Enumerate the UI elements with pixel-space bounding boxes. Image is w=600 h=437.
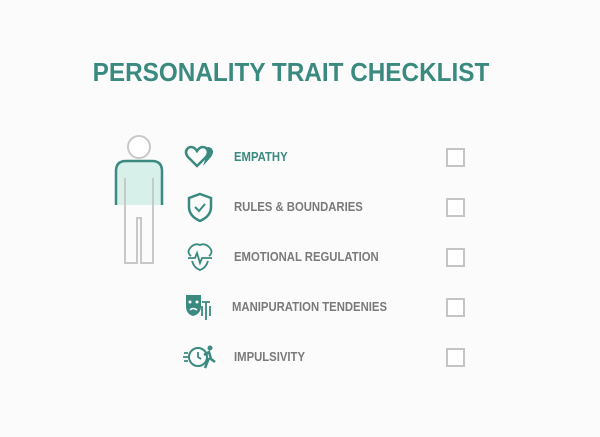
row: impulsivity: IMPULSIVITY	[234, 349, 305, 364]
row: empathy	[184, 146, 465, 168]
icon: runner clock	[183, 346, 216, 368]
row: rules	[188, 192, 465, 222]
icon: mask	[186, 295, 211, 320]
icon: brain	[188, 243, 212, 271]
row: empathy: EMPATHY	[234, 149, 288, 164]
icon: hearts	[184, 146, 213, 168]
row: impulsivity	[183, 346, 465, 368]
row: emotional regulation	[188, 243, 465, 271]
row: rules: RULES & BOUNDARIES	[234, 199, 363, 214]
row: manipulation	[186, 295, 465, 320]
row: emotional regulation: EMOTIONAL REGULATION	[234, 249, 379, 264]
row: manipulation: MANIPURATION TENDENIES	[232, 299, 387, 314]
title: PERSONALITY TRAIT CHECKLIST	[93, 57, 489, 87]
icon: shield	[188, 192, 212, 222]
figure: person	[114, 135, 164, 264]
